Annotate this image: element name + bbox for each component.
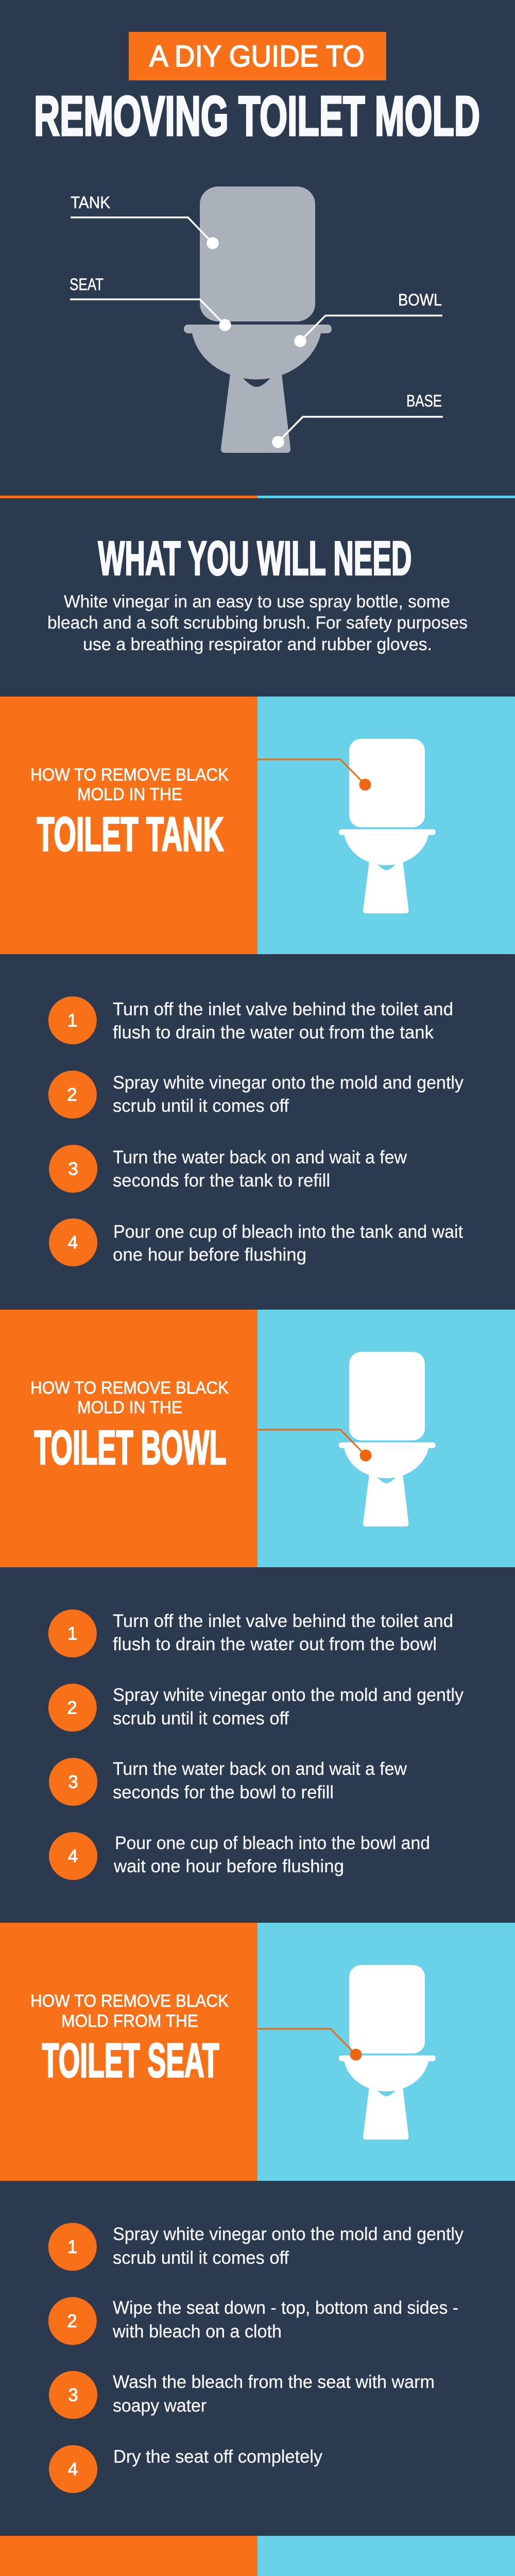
header xyxy=(34,32,480,147)
step 4: 4 xyxy=(68,1232,78,1253)
step 4: Dry the seat off completely xyxy=(113,2447,322,2467)
pointer: seat xyxy=(258,2029,362,2061)
section: what you will need xyxy=(47,532,468,654)
steps: toilet bowl xyxy=(48,1609,464,1880)
pointer: bowl xyxy=(258,1430,372,1461)
step 3 xyxy=(49,2371,435,2419)
panel: toilet tank xyxy=(0,697,515,954)
step 1: Spray white vinegar onto the mold and gently xyxy=(113,2224,464,2244)
icon: white toilet xyxy=(339,1965,436,2140)
callout: tank: TANK xyxy=(71,193,110,212)
callout: base xyxy=(272,392,443,448)
step 3: Wash the bleach from the seat with warm xyxy=(113,2372,435,2392)
heading: toilet seat xyxy=(30,1991,229,2087)
step 1: flush to drain the water out from the tank xyxy=(113,1022,434,1043)
heading: toilet bowl: HOW TO REMOVE BLACK xyxy=(30,1378,229,1398)
step 1: Turn off the inlet valve behind the toilet and xyxy=(113,999,453,1019)
step 3: seconds for the tank to refill xyxy=(113,1171,330,1191)
step 2 xyxy=(48,1684,464,1732)
step 3 xyxy=(49,1758,407,1806)
steps: toilet seat xyxy=(48,2223,464,2493)
callout: bowl xyxy=(294,291,442,347)
step 2 xyxy=(48,2297,458,2345)
callout: seat: SEAT xyxy=(70,275,104,294)
step 3: 3 xyxy=(68,1772,78,1792)
callout: base: BASE xyxy=(406,392,442,410)
step 4: Pour one cup of bleach into the bowl and xyxy=(115,1833,430,1853)
text block: White vinegar in an easy to use spray bottle, some xyxy=(64,592,450,612)
step 2: 2 xyxy=(67,1698,77,1718)
icon: grey toilet xyxy=(184,187,332,453)
step 1 xyxy=(48,1609,453,1657)
callout: tank xyxy=(71,193,219,249)
heading: toilet bowl: TOILET BOWL xyxy=(34,1421,227,1475)
step 4 xyxy=(49,1832,430,1880)
icon: white toilet xyxy=(339,739,436,913)
panel: toilet bowl xyxy=(0,1310,515,1567)
heading: toilet tank xyxy=(30,765,229,861)
callout: bowl: BOWL xyxy=(398,291,442,309)
steps: toilet tank xyxy=(48,996,464,1266)
step 1: scrub until it comes off xyxy=(113,2248,289,2268)
step 2: scrub until it comes off xyxy=(113,1708,289,1728)
step 4 xyxy=(49,2445,322,2493)
step 4: one hour before flushing xyxy=(113,1245,306,1265)
step 2: Wipe the seat down - top, bottom and sides - xyxy=(113,2298,458,2318)
step 2: scrub until it comes off xyxy=(113,1096,289,1116)
pointer: tank xyxy=(258,759,371,790)
step 1: 1 xyxy=(67,1624,77,1643)
text block: use a breathing respirator and rubber gloves. xyxy=(83,635,432,654)
icon: white toilet xyxy=(339,1352,436,1527)
heading: toilet bowl: MOLD IN THE xyxy=(77,1398,182,1417)
divider: two colour stripe xyxy=(0,496,515,498)
heading: toilet tank: HOW TO REMOVE BLACK xyxy=(30,765,229,785)
step 4: Pour one cup of bleach into the tank and wait xyxy=(113,1222,463,1242)
step 2 xyxy=(48,1071,464,1118)
heading: toilet seat: MOLD FROM THE xyxy=(61,2011,198,2031)
step 3 xyxy=(49,1145,407,1193)
step 3: Turn the water back on and wait a few xyxy=(113,1147,407,1167)
step 2: 2 xyxy=(67,1085,77,1105)
step 2: Spray white vinegar onto the mold and gently xyxy=(113,1685,464,1705)
text block: bleach and a soft scrubbing brush. For safety purposes xyxy=(47,613,468,633)
banner: a DIY guide to xyxy=(129,32,386,80)
heading: toilet seat: HOW TO REMOVE BLACK xyxy=(30,1991,229,2011)
step 4 xyxy=(49,1218,463,1266)
step 2: Spray white vinegar onto the mold and gently xyxy=(113,1073,464,1093)
step 1 xyxy=(48,996,453,1044)
step 3: Turn the water back on and wait a few xyxy=(113,1759,407,1779)
callout: seat xyxy=(70,275,231,331)
step 1: 1 xyxy=(67,1011,77,1030)
step 1: 1 xyxy=(67,2237,77,2257)
step 2: with bleach on a cloth xyxy=(112,2321,282,2342)
panel: toilet base xyxy=(0,2536,515,2576)
diagram: toilet parts xyxy=(70,187,443,453)
step 3: soapy water xyxy=(113,2396,207,2416)
heading: toilet tank: MOLD IN THE xyxy=(77,785,182,804)
panel: toilet seat xyxy=(0,1923,515,2181)
step 1: Turn off the inlet valve behind the toilet and xyxy=(113,1611,453,1631)
heading: toilet tank: TOILET TANK xyxy=(37,807,224,861)
step 4: 4 xyxy=(68,1846,78,1866)
step 3: seconds for the bowl to refill xyxy=(113,1783,334,1802)
step 2: 2 xyxy=(67,2311,77,2331)
step 4: 4 xyxy=(68,2460,78,2479)
step 3: 3 xyxy=(68,2385,78,2405)
heading: toilet bowl xyxy=(30,1378,229,1475)
step 1 xyxy=(48,2223,464,2271)
text block xyxy=(47,592,468,654)
step 1: flush to drain the water out from the bowl xyxy=(113,1634,437,1654)
heading: toilet seat: TOILET SEAT xyxy=(42,2033,219,2087)
banner: a DIY guide to: A DIY GUIDE TO xyxy=(149,40,365,73)
step 4: wait one hour before flushing xyxy=(113,1856,344,1876)
step 3: 3 xyxy=(68,1159,78,1179)
